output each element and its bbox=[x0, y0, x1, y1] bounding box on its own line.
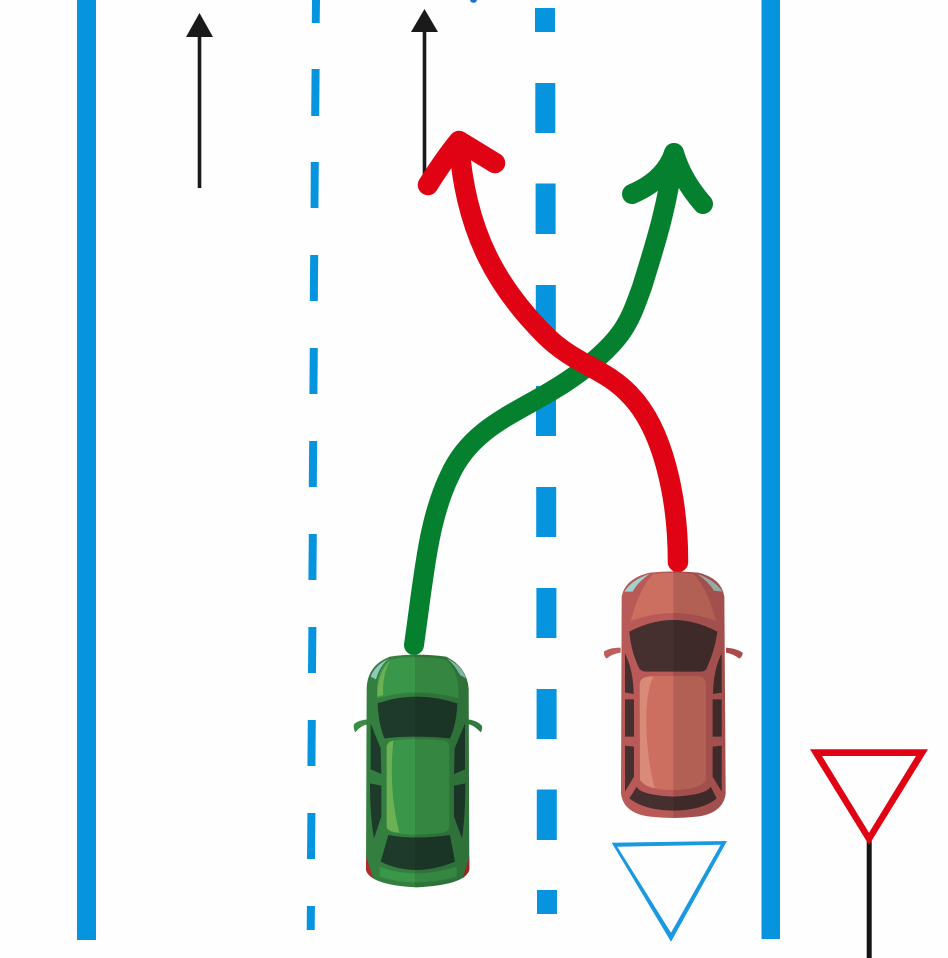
blue yield triangle road marking bbox=[612, 841, 727, 942]
thick dashed lane line bbox=[535, 8, 557, 914]
green path arrow bbox=[414, 153, 703, 645]
left solid lane line bbox=[77, 0, 96, 940]
small blue mark at top edge bbox=[470, 0, 477, 3]
red path arrow bbox=[428, 141, 678, 562]
right solid lane line bbox=[762, 0, 780, 939]
thin dashed lane line bbox=[307, 0, 320, 930]
black direction arrow, middle lane bbox=[411, 9, 438, 178]
yield sign bbox=[810, 749, 928, 958]
red car bbox=[604, 568, 743, 822]
black direction arrow, left lane bbox=[186, 13, 213, 188]
green car bbox=[354, 650, 482, 890]
